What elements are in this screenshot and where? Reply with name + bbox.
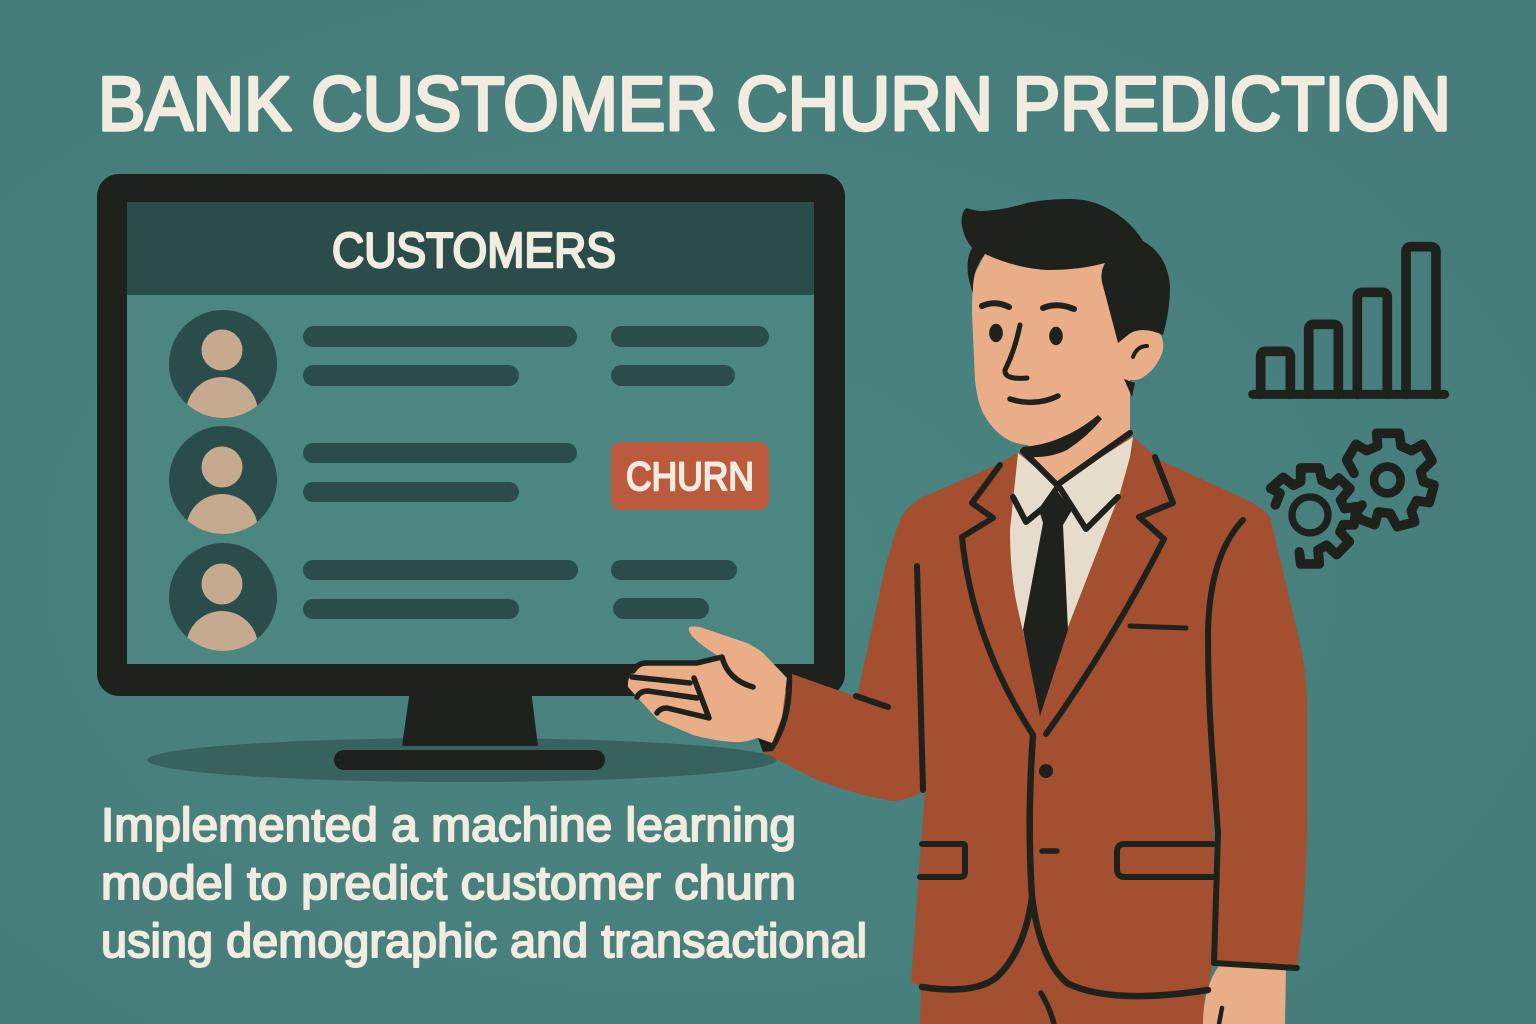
nose [1005, 325, 1027, 378]
head [962, 199, 1170, 457]
avatar 1 [169, 310, 277, 418]
mouth [1010, 396, 1058, 402]
ear [1118, 327, 1163, 380]
jacket [763, 437, 1307, 997]
collar lines [1013, 433, 1130, 529]
monitor stand [402, 690, 538, 746]
right arm seam [917, 566, 923, 790]
eyes [989, 324, 1003, 342]
neck shadow [1022, 415, 1102, 457]
customer row 1 [169, 310, 769, 418]
presenter [628, 199, 1307, 1024]
avatar 3 [169, 543, 277, 651]
cuff [758, 674, 792, 752]
button [1039, 764, 1053, 778]
jacket seam [922, 735, 1208, 996]
lapels [962, 457, 1173, 735]
icon: bar chart [1253, 247, 1445, 394]
screen header [127, 202, 814, 295]
face [972, 254, 1125, 445]
shirt [1010, 437, 1133, 705]
right pocket [1117, 844, 1213, 877]
hair [962, 199, 1170, 343]
screen heading: CUSTOMERS [332, 224, 616, 278]
right-side hand detail [1219, 1008, 1222, 1024]
avatar 2 [169, 426, 277, 534]
title: BANK CUSTOMER CHURN PREDICTION [98, 62, 1451, 147]
monitor shadow [147, 738, 777, 782]
description text: using demographic and transactional [101, 914, 867, 967]
eyebrows [982, 303, 1074, 309]
screen [127, 202, 814, 683]
small gear [1271, 468, 1357, 564]
left pocket [920, 844, 965, 877]
pointing hand [628, 626, 792, 752]
left hand [1203, 955, 1286, 1024]
customer row 2 [169, 426, 769, 534]
churn badge [611, 442, 769, 510]
arm crease [856, 696, 888, 707]
under-ear hair [1124, 379, 1135, 397]
description text [101, 798, 867, 967]
breast pocket [1130, 626, 1186, 628]
icon: gears [1271, 433, 1434, 564]
neck [1024, 375, 1130, 486]
customer row 3 [169, 543, 737, 651]
monitor frame [97, 174, 845, 696]
button hole [1042, 848, 1057, 854]
trouser crease [1041, 993, 1054, 1024]
ear detail [1133, 346, 1147, 357]
tie [1023, 488, 1072, 716]
churn badge: CHURN [626, 455, 754, 499]
description text: model to predict customer churn [101, 856, 796, 909]
monitor [97, 174, 845, 782]
large gear [1347, 433, 1434, 527]
left arm seam [1208, 520, 1297, 968]
description text: Implemented a machine learning [101, 798, 796, 851]
monitor base [334, 750, 605, 770]
trousers [920, 890, 1206, 1024]
sleeve gap [1212, 778, 1217, 932]
